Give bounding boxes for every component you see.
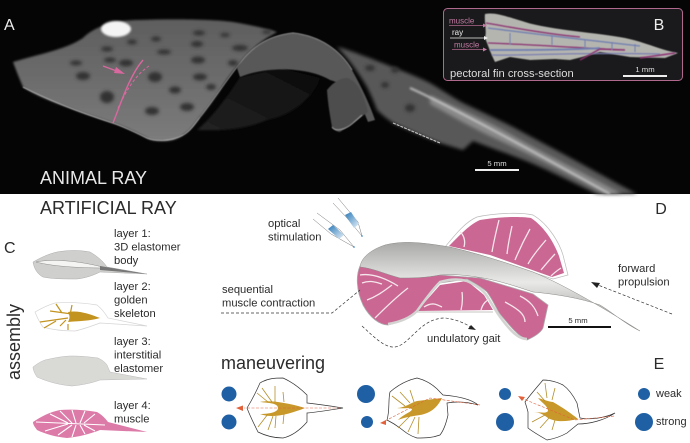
cross-section tissue xyxy=(485,13,678,62)
near pectoral fin xyxy=(13,19,277,141)
arrow: undulatory gait xyxy=(362,318,476,347)
text: sequential muscle contraction: muscle contraction xyxy=(222,297,315,309)
caption: pectoral fin cross-section: pectoral fin cross-section xyxy=(450,68,574,80)
text: sequential muscle contraction: sequential xyxy=(222,284,273,296)
scale bar: 5 mm: 5 mm xyxy=(487,159,507,168)
layer 3: interstitial elastomer xyxy=(33,356,147,386)
scale bar: 1 mm xyxy=(623,65,667,77)
panel B: pectoral fin cross-section xyxy=(444,8,682,80)
scale bar: 5 mm xyxy=(475,159,519,171)
text: layer 3: interstitial xyxy=(114,349,161,361)
panel A: animal ray photo xyxy=(0,0,690,194)
layer 1: elastomer body xyxy=(33,250,147,279)
text: layer 4: muscle xyxy=(114,413,149,425)
B labels and arrows: muscle xyxy=(454,40,480,50)
folded fin band xyxy=(237,33,375,122)
scale bar: 5 mm xyxy=(548,316,611,328)
pink under the fold xyxy=(417,281,493,311)
label D: D xyxy=(655,201,667,218)
text: forward propulsion: propulsion xyxy=(618,276,670,288)
text: layer 1: layer 1: xyxy=(114,228,151,240)
eye highlight xyxy=(101,21,131,37)
legend: weak and strong: weak xyxy=(655,388,682,400)
layer 4: muscle xyxy=(33,410,147,438)
text: optical stimulation: stimulation xyxy=(268,231,321,243)
dark spots xyxy=(70,30,415,115)
title: animal ray: ANIMAL RAY xyxy=(40,168,147,188)
text: undulatory gait: undulatory gait xyxy=(427,333,501,345)
text: layer 2: golden xyxy=(114,294,148,306)
layer 2: golden skeleton xyxy=(35,303,147,331)
far side of fin and tail xyxy=(337,47,637,194)
text: layer 2: layer 2: xyxy=(114,281,151,293)
text: layer 2: skeleton xyxy=(114,308,156,320)
bright tail spine xyxy=(430,95,622,194)
far fin with muscle xyxy=(445,213,568,279)
maneuver 3: turning xyxy=(496,380,615,440)
maneuver 1: symmetric xyxy=(222,378,343,438)
text: layer 1: 3D elastomer xyxy=(114,241,181,253)
underside shadow of fold xyxy=(197,68,320,130)
text: optical stimulation: optical xyxy=(268,218,300,230)
ray body and tail xyxy=(360,242,640,331)
label C: C xyxy=(4,240,16,257)
B labels and arrows: ray xyxy=(452,28,463,37)
title: artificial ray: ARTIFICIAL RAY xyxy=(40,198,177,218)
ray body photograph xyxy=(13,19,637,194)
text: layer 3: elastomer xyxy=(114,363,163,375)
fin flap xyxy=(327,78,368,132)
maneuver 2: turning xyxy=(357,378,480,438)
assembly vertical label: assembly xyxy=(4,304,24,380)
scale bar: 1 mm: 1 mm xyxy=(635,65,655,74)
legend: weak and strong xyxy=(635,388,687,431)
B labels and arrows xyxy=(449,16,488,52)
near fin with muscle xyxy=(357,266,548,340)
text: forward propulsion: forward xyxy=(618,263,655,275)
text: layer 3: layer 3: xyxy=(114,336,151,348)
B labels and arrows: muscle xyxy=(449,16,475,26)
heading: maneuvering: maneuvering xyxy=(221,353,325,373)
label E: E xyxy=(654,356,664,373)
label A: A xyxy=(4,17,15,34)
label B: B xyxy=(654,17,664,34)
scale bar: 5 mm: 5 mm xyxy=(568,316,588,325)
text: layer 4: layer 4: xyxy=(114,400,151,412)
arrow: forward propulsion xyxy=(591,282,672,314)
gray fold edge xyxy=(388,280,527,339)
leader line: muscle contraction xyxy=(221,290,360,313)
text: layer 1: body xyxy=(114,255,139,267)
pink muscle annotation lines xyxy=(103,60,149,123)
optical stimulation fibers xyxy=(313,198,363,248)
legend: weak and strong: strong xyxy=(656,416,687,428)
panel D: artificial ray on undulatory gait xyxy=(221,198,672,347)
panel E: maneuvering xyxy=(221,353,687,440)
